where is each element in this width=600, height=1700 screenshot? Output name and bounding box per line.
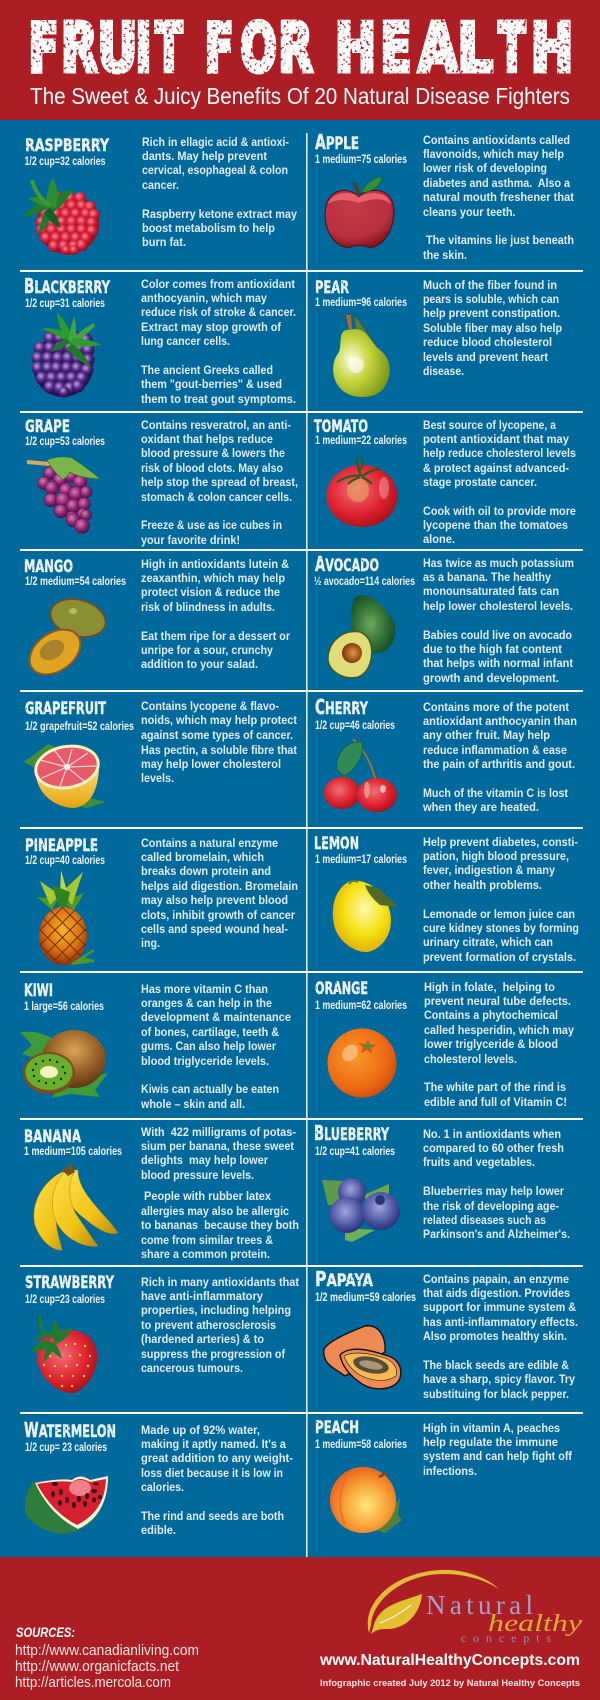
panel: blueberry (314, 1121, 570, 1242)
heading: papaya: PAPAYA (315, 1267, 374, 1291)
description: raspberry: Rich in ellagic acid & antioxi- (142, 135, 289, 149)
heading: pineapple: PINEAPPLE (25, 836, 98, 856)
heading: grapefruit: GRAPEFRUIT (25, 699, 106, 719)
heading: peach: PEACH (315, 1418, 359, 1438)
description: pineapple: breaks down protein and (141, 864, 271, 878)
description: lemon: cure kidney stones by forming (423, 921, 579, 935)
description: papaya: has anti-inflammatory effects. (423, 1315, 578, 1329)
description: lemon: urinary citrate, which can (423, 935, 553, 949)
description: apple: the skin. (423, 248, 467, 262)
description: orange: The white part of the rind is (424, 1080, 566, 1094)
description: banana: sium per banana, these sweet (141, 1139, 294, 1153)
description: banana: to bananas because they both (141, 1218, 299, 1232)
sources: http://www.canadianliving.com (15, 1643, 199, 1659)
description: banana: share a common protein. (141, 1247, 270, 1261)
icon: strawberry (31, 1315, 97, 1393)
description: grape: stomach & colon cancer cells. (141, 490, 292, 504)
description: avocado (423, 556, 574, 685)
icon: orange (328, 1028, 396, 1098)
heading: grape: GRAPE (25, 417, 70, 437)
sources (15, 1625, 199, 1691)
logo: Natural Healthy Concepts (368, 1570, 582, 1645)
description: mango: Eat them ripe for a dessert or (141, 629, 290, 643)
description: mango: unripe for a sour, crunchy (141, 643, 273, 657)
panel: avocado (314, 552, 574, 685)
icon: tomato (326, 458, 398, 527)
description: mango: protect vision & reduce the (141, 585, 280, 599)
description: strawberry: properties, including helping (141, 1303, 291, 1317)
description: cherry: the pain of arthritis and gout. (423, 757, 575, 771)
description: cherry: reduce inflammation & ease (423, 743, 567, 757)
panel: pear (315, 278, 562, 397)
description: cherry: Much of the vitamin C is lost (423, 786, 568, 800)
description: orange (424, 980, 574, 1109)
description: blueberry: Parkinson's and Alzheimer's. (423, 1227, 570, 1241)
description: blackberry: anthocyanin, which may (141, 291, 267, 305)
description: pineapple (141, 836, 298, 950)
icon: kiwi (20, 1030, 108, 1098)
footer band (0, 1557, 600, 1700)
description: papaya: substituing for black pepper. (423, 1387, 569, 1401)
description: lemon: Lemonade or lemon juice can (423, 907, 575, 921)
description: avocado: that helps with normal infant (423, 656, 573, 670)
description: watermelon (141, 1423, 293, 1537)
icon: pear (333, 315, 390, 397)
description: blueberry (423, 1127, 570, 1241)
description: strawberry: to prevent atherosclerosis (141, 1318, 276, 1332)
icon: pineapple (37, 870, 94, 965)
description: orange: edible and full of Vitamin C! (424, 1095, 567, 1109)
description: pineapple: clots, inhibit growth of cancer (141, 908, 295, 922)
description: watermelon: edible. (141, 1523, 176, 1537)
description: mango: risk of blindness in adults. (141, 600, 275, 614)
description: tomato: potent antioxidant that may (423, 432, 569, 446)
description: orange: called hesperidin, which may (424, 1023, 574, 1037)
calories: grape: 1/2 cup=53 calories (25, 434, 105, 448)
title: H (531, 9, 573, 87)
sources: http://www.organicfacts.net (15, 1659, 179, 1675)
heading: blackberry: BLACKBERRY (24, 274, 110, 298)
description: grapefruit (141, 699, 297, 785)
heading: apple: APPLE (315, 130, 359, 154)
description: kiwi: Has more vitamin C than (141, 982, 268, 996)
description: blackberry: reduce risk of stroke & cancer. (141, 305, 296, 319)
description: strawberry: suppress the progression of (141, 1347, 286, 1361)
description: lemon: Help prevent diabetes, consti- (423, 835, 578, 849)
description: pear: reduce blood cholesterol (423, 335, 552, 349)
description: papaya: have a sharp, spicy flavor. Try (423, 1372, 575, 1386)
description: strawberry: cancerous tumours. (141, 1361, 243, 1375)
title: F (28, 9, 58, 87)
description: raspberry: boost metabolism to help (142, 221, 275, 235)
description: peach: help regulate the immune (423, 1435, 558, 1449)
sources: SOURCES: (16, 1625, 75, 1640)
description: watermelon: calories. (141, 1480, 184, 1494)
description: pear: help prevent constipation. (423, 306, 560, 320)
panel: orange (315, 979, 574, 1109)
heading: mango: MANGO (24, 557, 73, 577)
description: papaya (423, 1272, 578, 1401)
description: pineapple: helps aid digestion. Bromelain (141, 879, 298, 893)
panel: watermelon (24, 1418, 293, 1537)
icon: peach (330, 1467, 402, 1533)
calories: apple: 1 medium=75 calories (315, 152, 407, 166)
description: blackberry: The ancient Greeks called (141, 363, 273, 377)
description: avocado: Babies could live on avocado (423, 628, 572, 642)
description: apple: diabetes and asthma. Also a (423, 176, 570, 190)
description: blueberry: Blueberries may help lower (423, 1184, 564, 1198)
icon: grape (27, 457, 100, 534)
description: grape: help stop the spread of breast, (141, 475, 298, 489)
description: strawberry: (hardened arteries) & to (141, 1332, 264, 1346)
description: blackberry: Color comes from antioxidant (141, 277, 295, 291)
description: mango: High in antioxidants lutein & (141, 557, 289, 571)
description: grapefruit: levels. (141, 771, 174, 785)
icon: watermelon (25, 1476, 109, 1534)
description: orange: Contains a phytochemical (424, 1008, 558, 1022)
title (28, 9, 573, 87)
header band (0, 0, 600, 120)
icon: apple (325, 176, 394, 247)
description: banana: come from similar trees & (141, 1233, 273, 1247)
calories: papaya: 1/2 medium=59 calories (315, 1290, 416, 1304)
icon: banana (34, 1164, 118, 1250)
icon: raspberry (22, 178, 100, 255)
description: lemon: pation, high blood pressure, (423, 849, 569, 863)
description: raspberry: cervical, esophageal & colon (142, 163, 288, 177)
description: grape: risk of blood clots. May also (141, 461, 283, 475)
description: mango: addition to your salad. (141, 657, 258, 671)
description: blackberry: lung cancer cells. (141, 334, 230, 348)
icon: lemon (333, 881, 399, 952)
description: tomato: help reduce cholesterol levels (423, 446, 576, 460)
calories: kiwi: 1 large=56 calories (24, 999, 104, 1013)
calories: blueberry: 1/2 cup=41 calories (315, 1144, 395, 1158)
description: pear: pears is soluble, which can (423, 292, 559, 306)
description: apple: natural mouth freshener that (423, 190, 574, 204)
description: orange: cholesterol levels. (424, 1052, 517, 1066)
panel: grapefruit (24, 699, 297, 808)
description: watermelon: Made up of 92% water, (141, 1423, 260, 1437)
panel: peach (315, 1418, 573, 1533)
description: cherry (422, 700, 577, 814)
description: cherry: when they are heated. (422, 800, 539, 814)
description: watermelon: The rind and seeds are both (141, 1509, 284, 1523)
description: raspberry (142, 135, 297, 249)
logo: Natural Healthy Concepts: concepts (461, 1631, 551, 1645)
description: watermelon: making it aptly named. It's a (141, 1437, 286, 1451)
description: banana: delights may help lower (141, 1153, 268, 1167)
description: mango (141, 557, 290, 671)
description: avocado: Has twice as much potassium (423, 556, 574, 570)
calories: banana: 1 medium=105 calories (24, 1144, 122, 1158)
description: kiwi: whole – skin and all. (140, 1097, 245, 1111)
description: papaya: Also promotes healthy skin. (423, 1329, 567, 1343)
heading: strawberry: STRAWBERRY (25, 1273, 114, 1293)
description: papaya: The black seeds are edible & (423, 1358, 569, 1372)
description: avocado: help lower cholesterol levels. (423, 599, 573, 613)
panel: cherry (315, 695, 577, 814)
icon: papaya (324, 1326, 401, 1389)
description: kiwi: oranges & can help in the (141, 996, 272, 1010)
description: blackberry: them to treat gout symptoms. (141, 392, 296, 406)
description: peach (423, 1421, 573, 1478)
description: pear: disease. (423, 364, 464, 378)
description: banana (141, 1125, 299, 1261)
heading: avocado: AVOCADO (315, 552, 379, 576)
panel: kiwi (20, 981, 291, 1111)
description: kiwi: Kiwis can actually be eaten (141, 1082, 279, 1096)
description: grape: Freeze & use as ice cubes in (141, 518, 282, 532)
description: pear: Soluble fiber may also help (423, 321, 562, 335)
description: avocado: monounsaturated fats can (423, 584, 559, 598)
description: blueberry: fruits and vegetables. (423, 1155, 535, 1169)
description: blackberry (141, 277, 296, 406)
description: apple (423, 133, 574, 262)
description: kiwi (140, 982, 291, 1111)
calories: mango: 1/2 medium=54 calories (25, 574, 126, 588)
description: apple: cleans your teeth. (423, 205, 516, 219)
description: peach: infections. (423, 1464, 477, 1478)
calories: blackberry: 1/2 cup=31 calories (25, 296, 105, 310)
title: H (335, 9, 376, 87)
description: pineapple: called bromelain, which (141, 850, 264, 864)
title: A (418, 9, 458, 87)
heading: tomato: TOMATO (314, 417, 368, 437)
description: grapefruit: Contains lycopene & flavo- (141, 699, 279, 713)
title: U (97, 9, 137, 87)
description: kiwi: blood triglyceride levels. (141, 1054, 269, 1068)
description: banana: People with rubber latex (144, 1189, 271, 1203)
calories: watermelon: 1/2 cup= 23 calories (25, 1440, 107, 1454)
description: blueberry: No. 1 in antioxidants when (423, 1127, 561, 1141)
description: tomato: alone. (423, 532, 455, 546)
title: R (61, 9, 98, 87)
description: blueberry: the risk of developing age- (423, 1199, 559, 1213)
heading: lemon: LEMON (314, 834, 359, 854)
description: cherry: antioxidant anthocyanin than (423, 714, 577, 728)
heading: pear: PEAR (315, 278, 349, 298)
description: raspberry: dants. May help prevent (142, 149, 267, 163)
panel: grape (25, 417, 298, 547)
description: pear: Much of the fiber found in (423, 278, 557, 292)
website: www.NaturalHealthyConcepts.com (319, 1652, 580, 1669)
description: blueberry: compared to 60 other fresh (423, 1141, 564, 1155)
description: apple: lower risk of developing (423, 161, 547, 175)
description: blueberry: related diseases such as (423, 1213, 546, 1227)
description: grape: Contains resveratrol, an anti- (141, 418, 291, 432)
icon: blackberry (32, 312, 102, 398)
description: grape (141, 418, 298, 547)
calories: raspberry: 1/2 cup=32 calories (24, 154, 106, 168)
description: banana: blood pressure levels. (141, 1168, 254, 1182)
heading: watermelon: WATERMELON (24, 1418, 116, 1442)
description: mango: zeaxanthin, which may help (141, 571, 285, 585)
title: I (136, 9, 152, 87)
description: pineapple: cells and speed wound heal- (141, 922, 288, 936)
description: tomato: lycopene than the tomatoes (423, 518, 568, 532)
panel: apple (315, 130, 574, 262)
description: kiwi: development & maintenance (141, 1010, 291, 1024)
description: papaya: that aids digestion. Provides (423, 1286, 570, 1300)
calories: strawberry: 1/2 cup=23 calories (25, 1292, 105, 1306)
description: pineapple: Contains a natural enzyme (141, 836, 278, 850)
description: avocado: as a banana. The healthy (423, 570, 551, 584)
calories: lemon: 1 medium=17 calories (315, 852, 407, 866)
title: T (155, 9, 183, 87)
description: apple: The vitamins lie just beneath (426, 233, 574, 247)
heading: cherry: CHERRY (315, 695, 368, 719)
description: strawberry: have anti-inflammatory (141, 1289, 263, 1303)
title: R (278, 9, 313, 87)
icon: mango (21, 593, 110, 684)
panel: strawberry (25, 1273, 299, 1393)
description: kiwi: gums. Can also help lower (141, 1039, 276, 1053)
title: L (457, 9, 493, 87)
description: raspberry: cancer. (142, 178, 179, 192)
description: lemon (423, 835, 579, 964)
description: raspberry: burn fat. (142, 235, 186, 249)
heading: orange: ORANGE (315, 979, 368, 999)
description: orange: prevent neural tube defects. (424, 994, 571, 1008)
icon: avocado (328, 595, 395, 678)
heading: banana: BANANA (24, 1127, 82, 1147)
description: grape: blood pressure & lowers the (141, 446, 285, 460)
description: avocado: due to the high fat content (423, 642, 562, 656)
calories: avocado: ½ avocado=114 calories (314, 574, 415, 588)
heading: raspberry: RASPBERRY (25, 136, 110, 156)
description: watermelon: loss diet because it is low in (141, 1466, 283, 1480)
logo: Natural Healthy Concepts: healthy (488, 1611, 582, 1637)
description: peach: High in vitamin A, peaches (423, 1421, 560, 1435)
calories: peach: 1 medium=58 calories (315, 1437, 407, 1451)
description: cherry: any other fruit. May help (423, 728, 550, 742)
calories: tomato: 1 medium=22 calories (315, 433, 407, 447)
panel: banana (24, 1125, 299, 1261)
description: banana: allergies may also be allergic (141, 1204, 289, 1218)
heading: kiwi: KIWI (24, 981, 53, 1001)
panel: mango (21, 557, 290, 684)
description: lemon: fever, indigestion & many (423, 863, 555, 877)
description: tomato: stage prostate cancer. (423, 475, 537, 489)
description: kiwi: of bones, cartilage, teeth & (141, 1025, 279, 1039)
description: pineapple: may also help prevent blood (141, 893, 288, 907)
title: F (205, 9, 234, 87)
description: cherry: Contains more of the potent (423, 700, 569, 714)
description: tomato (423, 418, 576, 546)
description: grapefruit: Has pectin, a soluble fibre that (141, 743, 297, 757)
title: E (380, 9, 411, 87)
description: blackberry: them "gout-berries" & used (141, 377, 282, 391)
description: blackberry: Extract may stop growth of (141, 320, 282, 334)
description: grapefruit: against some types of cancer. (141, 728, 293, 742)
description: orange: lower triglyceride & blood (424, 1037, 558, 1051)
panel: tomato (314, 417, 576, 546)
description: apple: Contains antioxidants called (423, 133, 570, 147)
description: pineapple: ing. (141, 936, 160, 950)
description: tomato: Best source of lycopene, a (423, 418, 556, 432)
description: tomato: Cook with oil to provide more (423, 504, 576, 518)
calories: pear: 1 medium=96 calories (315, 295, 407, 309)
description: raspberry: Raspberry ketone extract may (142, 207, 297, 221)
calories: cherry: 1/2 cup=46 calories (315, 718, 395, 732)
title: T (498, 9, 526, 87)
description: orange: High in folate, helping to (424, 980, 555, 994)
calories: pineapple: 1/2 cup=40 calories (25, 853, 105, 867)
description: pear (423, 278, 562, 378)
heading: blueberry: BLUEBERRY (314, 1121, 389, 1145)
description: peach: system and can help fight off (423, 1449, 573, 1463)
calories: grapefruit: 1/2 grapefruit=52 calories (25, 719, 134, 733)
sources: http://articles.mercola.com (15, 1675, 171, 1691)
description: papaya: support for immune system & (423, 1300, 576, 1314)
description: avocado: growth and development. (423, 671, 559, 685)
description: lemon: prevent formation of crystals. (423, 950, 576, 964)
calories: orange: 1 medium=62 calories (315, 998, 407, 1012)
description: strawberry (141, 1275, 299, 1375)
description: watermelon: great addition to any weight- (141, 1451, 293, 1465)
panel: blackberry (24, 274, 296, 406)
description: grapefruit: may help lower cholesterol (141, 757, 281, 771)
description: lemon: other health problems. (423, 878, 542, 892)
description: pear: levels and prevent heart (423, 350, 548, 364)
description: banana: With 422 milligrams of potas- (141, 1125, 296, 1139)
title: O (240, 9, 277, 87)
panel: papaya (315, 1267, 578, 1401)
icon: blueberry (322, 1178, 400, 1242)
description: grape: oxidant that helps reduce (141, 432, 273, 446)
description: tomato: & protect against advanced- (423, 461, 569, 475)
panel: lemon (314, 834, 579, 964)
icon: grapefruit (24, 740, 106, 808)
panel: pineapple (25, 836, 298, 965)
logo: Natural Healthy Concepts: Natural (426, 1590, 533, 1620)
description: apple: flavonoids, which may help (423, 147, 564, 161)
description: papaya: Contains papain, an enzyme (423, 1272, 569, 1286)
description: strawberry: Rich in many antioxidants that (141, 1275, 299, 1289)
credit: Infographic created July 2012 by Natural Healthy Concepts (320, 1678, 580, 1689)
panel: raspberry (22, 135, 297, 255)
icon: cherry (324, 739, 397, 812)
description: grape: your favorite drink! (141, 533, 240, 547)
description: grapefruit: noids, which may help protect (141, 713, 297, 727)
